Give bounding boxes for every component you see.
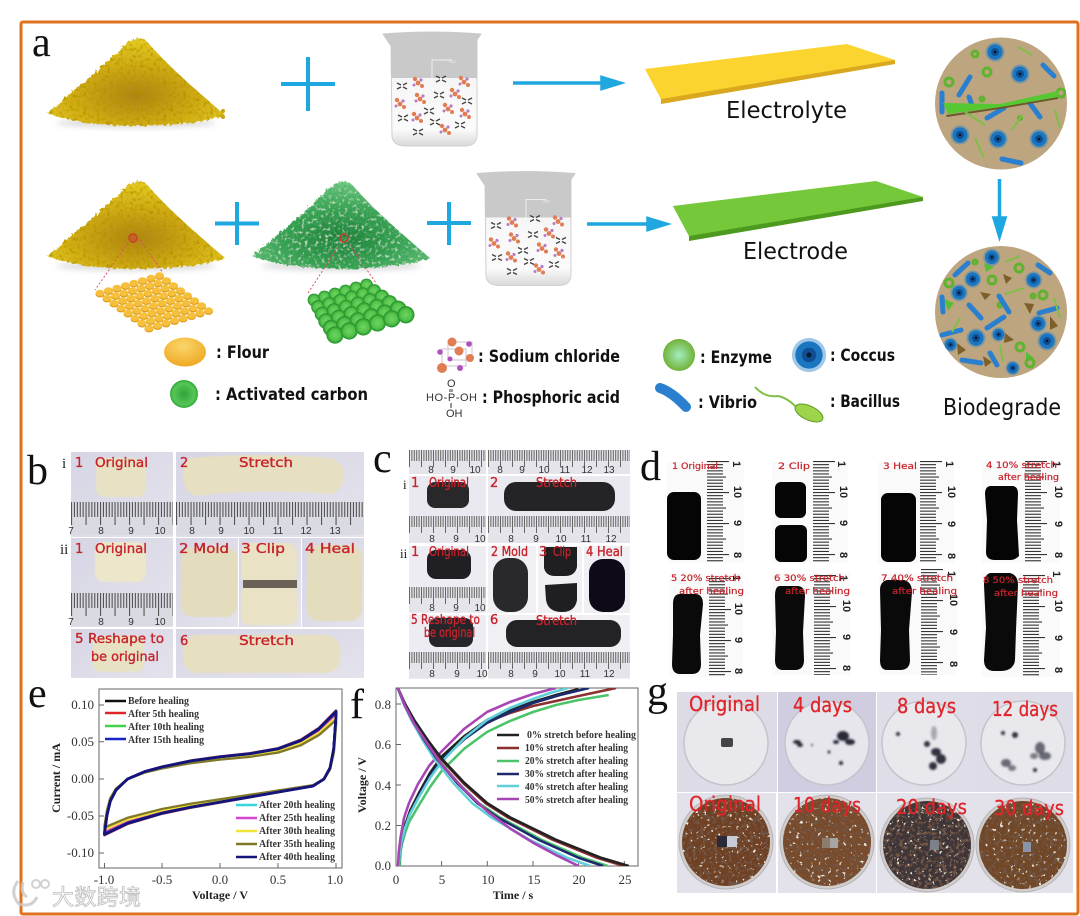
legend lower [236, 800, 335, 863]
top ruler strip: 11 [560, 465, 571, 476]
photo row iii: Stretch [536, 614, 577, 629]
photo row ii: 8 [98, 617, 104, 628]
photo 1 original: 10 [731, 486, 743, 498]
photo 4 10% stretch: 4 10% stretch [986, 461, 1057, 471]
legend [497, 730, 636, 806]
photo 3 heal: 1 [943, 461, 955, 467]
soil degradation row: Original [689, 792, 761, 816]
panel f: charge-discharge chart [350, 682, 638, 902]
legend: activated carbon [170, 380, 368, 408]
photo row ii: 10 [474, 603, 486, 614]
photo row iii: 8 [508, 669, 514, 680]
photo row ii: 9 [453, 603, 459, 614]
panel label a: a [32, 20, 51, 66]
photo 4 10% stretch: 9 [1052, 521, 1064, 527]
soil degradation row: 20 days [896, 795, 967, 819]
photo 7 40% stretch: 1 [945, 571, 957, 577]
top ruler strip: 13 [603, 465, 615, 476]
photo 7 40% stretch: 10 [947, 594, 959, 606]
photo 4 10% stretch: 1 [1050, 461, 1062, 467]
photo 6 30% stretch: 8 [840, 665, 852, 671]
plot frame and axes: 5 [439, 872, 445, 887]
panel label f: f [350, 682, 364, 728]
plot frame and axes: 0.0 [375, 858, 391, 873]
photo row ii: Original [95, 542, 147, 557]
top ruler strip: 10 [469, 465, 481, 476]
legend: phosphoric acid [426, 378, 620, 420]
photo 4 10% stretch: 8 [1052, 552, 1064, 558]
water degradation row: 12 days [992, 697, 1058, 721]
photo row iii: 6 [490, 613, 498, 628]
top ruler strip: 8 [428, 465, 434, 476]
legend: vibrio [660, 388, 757, 413]
photo row iii: 5 Reshape to [75, 632, 164, 647]
plot frame and axes: Voltage / V [355, 757, 369, 813]
photo 8 50% stretch: 8 [1052, 667, 1064, 673]
arrow down to biodegraded [994, 179, 1005, 236]
photo row i: 13 [329, 526, 341, 537]
icon: activated carbon pile [252, 181, 430, 271]
photo 8 50% stretch [982, 571, 1064, 677]
plot frame and axes: Voltage / V [192, 888, 248, 902]
photo 2 clip: 1 [835, 461, 847, 467]
photo row ii: 1 [411, 545, 419, 560]
photo row i: 8 [98, 526, 104, 537]
panel a: materials and biodegradation scheme [32, 20, 1067, 426]
soil degradation row [677, 792, 1073, 893]
photo row i: 10 [555, 534, 567, 545]
top ruler strip: 9 [519, 465, 525, 476]
water degradation row: 4 days [793, 693, 852, 717]
photo 5 20% stretch: 10 [732, 603, 744, 615]
photo row i: Stretch [239, 456, 293, 471]
photo row i: 9 [218, 526, 224, 537]
photo row i: 12 [605, 534, 617, 545]
label Biodegrade: Biodegrade [943, 395, 1061, 421]
icon: soil circle with bacteria and sheet [935, 38, 1067, 170]
photo 7 40% stretch: 9 [947, 629, 959, 635]
legend: phosphoric acid: OH [446, 408, 463, 420]
photo row i: 9 [453, 534, 459, 545]
photo 6 30% stretch [772, 573, 852, 675]
plot frame and axes: 0.05 [71, 734, 94, 749]
photo 5 20% stretch: 8 [732, 668, 744, 674]
photo 2 clip: 9 [837, 520, 849, 526]
plot frame and axes: -0.10 [67, 845, 94, 860]
photo row iii: 9 [532, 669, 538, 680]
icon: beaker bottom row [477, 172, 575, 286]
photo row i: 12 [300, 526, 312, 537]
photo 5 20% stretch: 1 [730, 575, 742, 581]
panel b: flour electrolyte self-healing photos [27, 448, 364, 678]
activated carbon lattice with zoom lines [308, 241, 415, 344]
photo row iii: 8 [429, 669, 435, 680]
icon: plus sign [281, 57, 335, 111]
legend: enzyme: : Enzyme [700, 348, 772, 368]
legend upper [105, 696, 204, 746]
icon: flour pile top row [47, 38, 225, 128]
photo 1 original: 8 [731, 552, 743, 558]
photo row iii: 9 [454, 669, 460, 680]
photo row i: 10 [154, 526, 166, 537]
photo row i: 1 [75, 456, 83, 471]
legend: 0% stretch before healing [527, 730, 636, 741]
photo 7 40% stretch: after healing [892, 587, 957, 597]
row labels: i [62, 456, 66, 472]
photo row iii: 11 [580, 669, 591, 680]
photo 1 original: 1 [730, 461, 742, 467]
photo 7 40% stretch [879, 569, 959, 675]
photo row ii: Clip [553, 545, 571, 560]
photo row ii: 2 Mold [179, 542, 229, 557]
label Electrode: Electrode [743, 239, 848, 265]
photo row ii [68, 538, 364, 628]
photo row i: 1 [411, 476, 419, 491]
photo 2 clip: 10 [837, 486, 849, 498]
panel label b: b [27, 448, 48, 494]
legend: flour [164, 338, 270, 366]
electrode sheet [673, 181, 923, 241]
legend: coccus [792, 338, 895, 372]
soil degradation row: 30 days [994, 796, 1064, 820]
photo row i: 2 [180, 456, 188, 471]
plot frame and axes: 10 [482, 872, 494, 887]
photo 8 50% stretch: 10 [1052, 600, 1064, 612]
plot frame and axes [49, 689, 343, 902]
legend lower: After 35th healing [259, 839, 335, 850]
legend: enzyme [663, 339, 772, 371]
top ruler strip [409, 450, 630, 476]
photo row i: Original [95, 456, 148, 471]
panel e: cyclic voltammetry chart [28, 671, 343, 902]
icon: degraded soil circle [935, 246, 1067, 378]
plot frame and axes: -1.0 [94, 872, 114, 887]
legend upper: After 15th healing [128, 735, 204, 746]
photo row ii: 8 [429, 603, 435, 614]
plot frame and axes: 0.4 [375, 778, 392, 793]
panel g: degradation photos [647, 669, 1073, 893]
plot frame and axes: 0.00 [71, 771, 94, 786]
legend: coccus: : Coccus [830, 346, 895, 366]
photo row i: 8 [429, 534, 435, 545]
photo 1 original: 9 [731, 520, 743, 526]
legend lower: After 40th healing [259, 852, 335, 863]
photo row iii: 5 Reshape to [411, 613, 480, 628]
photo row ii: 4 Heal [305, 542, 355, 557]
photo row iii: 10 [554, 669, 566, 680]
photo row i: Original [429, 476, 469, 491]
legend: bacillus [755, 387, 900, 426]
photo row ii: 4 Heal [586, 545, 623, 560]
panel c: flour-carbon electrode self-healing photos [373, 436, 630, 680]
photo 2 clip: 8 [837, 552, 849, 558]
photo 5 20% stretch: 9 [732, 637, 744, 643]
photo 7 40% stretch: 8 [947, 661, 959, 667]
legend: bacillus: : Bacillus [830, 392, 900, 412]
legend: 50% stretch after healing [525, 795, 628, 806]
panel label d: d [640, 444, 661, 490]
photo 8 50% stretch: 9 [1052, 635, 1064, 641]
plot frame and axes: 0.8 [375, 697, 391, 712]
photo row iii: Stretch [239, 634, 294, 649]
photo row ii: 9 [128, 617, 134, 628]
panel d: stretch after healing photos [640, 444, 1064, 677]
legend lower: After 20th healing [259, 800, 335, 811]
legend: flour: : Flour [216, 343, 270, 363]
panel label g: g [647, 669, 668, 715]
photo row iii: be original [91, 650, 159, 665]
flour lattice with zoom lines [95, 240, 213, 332]
photo 6 30% stretch: 9 [840, 634, 852, 640]
plot frame and axes: Current / mA [49, 743, 63, 813]
photo 3 heal: 8 [945, 553, 957, 559]
plot frame and axes: 1.0 [327, 872, 343, 887]
photo row i: 11 [273, 526, 284, 537]
photo row i: 2 [490, 476, 498, 491]
photo row i: 11 [581, 534, 592, 545]
legend: sodium chloride [437, 338, 620, 373]
legend lower: After 25th healing [259, 813, 335, 824]
photo row ii: 10 [154, 617, 166, 628]
photo row i [409, 476, 630, 545]
legend: phosphoric acid: O [447, 378, 456, 390]
photo row iii: 10 [476, 669, 488, 680]
row labels: ii [400, 546, 408, 561]
photo 8 50% stretch: after healing [994, 589, 1058, 599]
photo 4 10% stretch: 10 [1052, 486, 1064, 498]
plot frame and axes: Time / s [493, 888, 534, 902]
photo row iii [71, 629, 364, 678]
photo 5 20% stretch: 5 20% stretch [671, 574, 740, 584]
top ruler strip: 9 [450, 465, 456, 476]
photo 6 30% stretch: 6 30% stretch [774, 574, 845, 584]
photo 3 heal: 3 Heal [883, 462, 917, 472]
water degradation row: 8 days [897, 694, 956, 718]
photo 4 10% stretch: after healing [998, 473, 1059, 483]
photo row ii [409, 545, 630, 614]
row labels: i [403, 477, 407, 492]
legend: 30% stretch after healing [525, 769, 628, 780]
photo row iii [409, 613, 630, 680]
photo 7 40% stretch: 7 40% stretch [881, 574, 953, 584]
photo row ii: 2 Mold [491, 545, 528, 560]
plot frame and axes: 0.2 [375, 818, 391, 833]
plot frame and axes: 0.10 [71, 697, 94, 712]
photo 6 30% stretch: 10 [840, 600, 852, 612]
charge and discharge curves [397, 688, 629, 866]
photo row i: 9 [533, 534, 539, 545]
photo 2 clip: 2 Clip [778, 462, 810, 472]
legend: 20% stretch after healing [525, 756, 628, 767]
legend: 10% stretch after healing [525, 743, 628, 754]
legend: sodium chloride: : Sodium chloride [478, 347, 620, 367]
photo 4 10% stretch [982, 461, 1064, 563]
photo 3 heal: 9 [945, 521, 957, 527]
photo row ii: 7 [68, 617, 74, 628]
label Electrolyte: Electrolyte [726, 98, 847, 124]
panel label e: e [28, 671, 47, 717]
photo row iii: be original [424, 626, 475, 641]
row labels [60, 456, 68, 558]
photo row i: 8 [189, 526, 195, 537]
photo 8 50% stretch: 8 50% stretch [983, 576, 1053, 586]
water degradation row [677, 692, 1073, 792]
top ruler strip: 8 [497, 465, 503, 476]
photo row i: Stretch [536, 476, 577, 491]
plot frame and axes: 0 [393, 872, 399, 887]
photo row ii: Original [429, 545, 469, 560]
photo 8 50% stretch: 1 [1050, 571, 1062, 577]
arrow to electrolyte [513, 78, 620, 88]
icon: flour pile bottom row [47, 181, 225, 271]
plot frame and axes: 20 [572, 872, 586, 887]
plot frame and axes: 15 [528, 872, 540, 887]
photo row i [68, 452, 364, 537]
legend upper: After 5th healing [128, 709, 199, 720]
plot frame and axes: 0.5 [270, 872, 286, 887]
top ruler strip: 10 [538, 465, 550, 476]
photo 1 original: 1 Original [672, 462, 718, 472]
icon: plus sign [215, 202, 259, 245]
plot frame and axes: -0.05 [67, 808, 94, 823]
plot frame and axes: 0.6 [375, 737, 392, 752]
watermark [14, 880, 141, 910]
top ruler strip: 12 [581, 465, 593, 476]
photo 3 heal [878, 461, 957, 563]
photo row i: 7 [68, 526, 74, 537]
photo row iii: 6 [180, 634, 188, 649]
legend: 40% stretch after healing [525, 782, 628, 793]
photo row ii: 3 [539, 545, 547, 560]
photo 2 clip [772, 461, 849, 563]
photo row iii: 12 [603, 669, 615, 680]
icon: beaker top row [383, 32, 481, 146]
legend: activated carbon: : Activated carbon [215, 385, 368, 405]
photo 3 heal: 10 [945, 486, 957, 498]
photo 5 20% stretch [669, 573, 744, 677]
legend: vibrio: : Vibrio [698, 393, 757, 413]
legend: phosphoric acid: : Phosphoric acid [482, 388, 620, 408]
soil degradation row: 10 days [793, 793, 861, 817]
photo row i: 9 [128, 526, 134, 537]
photo 6 30% stretch: after healing [785, 587, 850, 597]
plot frame and axes: 25 [618, 872, 632, 887]
panel label c: c [373, 436, 392, 482]
photo row ii: 1 [75, 542, 83, 557]
plot frame and axes: 0.0 [212, 872, 228, 887]
CV curves [104, 711, 336, 835]
photo row i: 10 [474, 534, 486, 545]
plot frame and axes: -0.5 [152, 872, 172, 887]
water degradation row: Original [689, 692, 760, 716]
legend upper: After 10th healing [128, 722, 204, 733]
photo 1 original [667, 461, 744, 563]
row labels: ii [60, 542, 68, 558]
photo row ii: 3 Clip [241, 542, 285, 557]
legend lower: After 30th healing [259, 826, 335, 837]
plot frame and axes [355, 688, 638, 902]
icon: plus sign [427, 202, 471, 245]
electrolyte sheet [645, 44, 895, 104]
photo 6 30% stretch: 1 [837, 575, 849, 581]
photo row i: 8 [508, 534, 514, 545]
legend upper: Before healing [128, 696, 189, 707]
photo 5 20% stretch: after healing [679, 587, 744, 597]
legend: phosphoric acid: HO-P-OH [426, 392, 477, 404]
arrow to electrode [587, 218, 666, 230]
watermark: 大数跨境 [52, 885, 141, 910]
row labels [400, 477, 408, 561]
photo row i: 10 [243, 526, 255, 537]
